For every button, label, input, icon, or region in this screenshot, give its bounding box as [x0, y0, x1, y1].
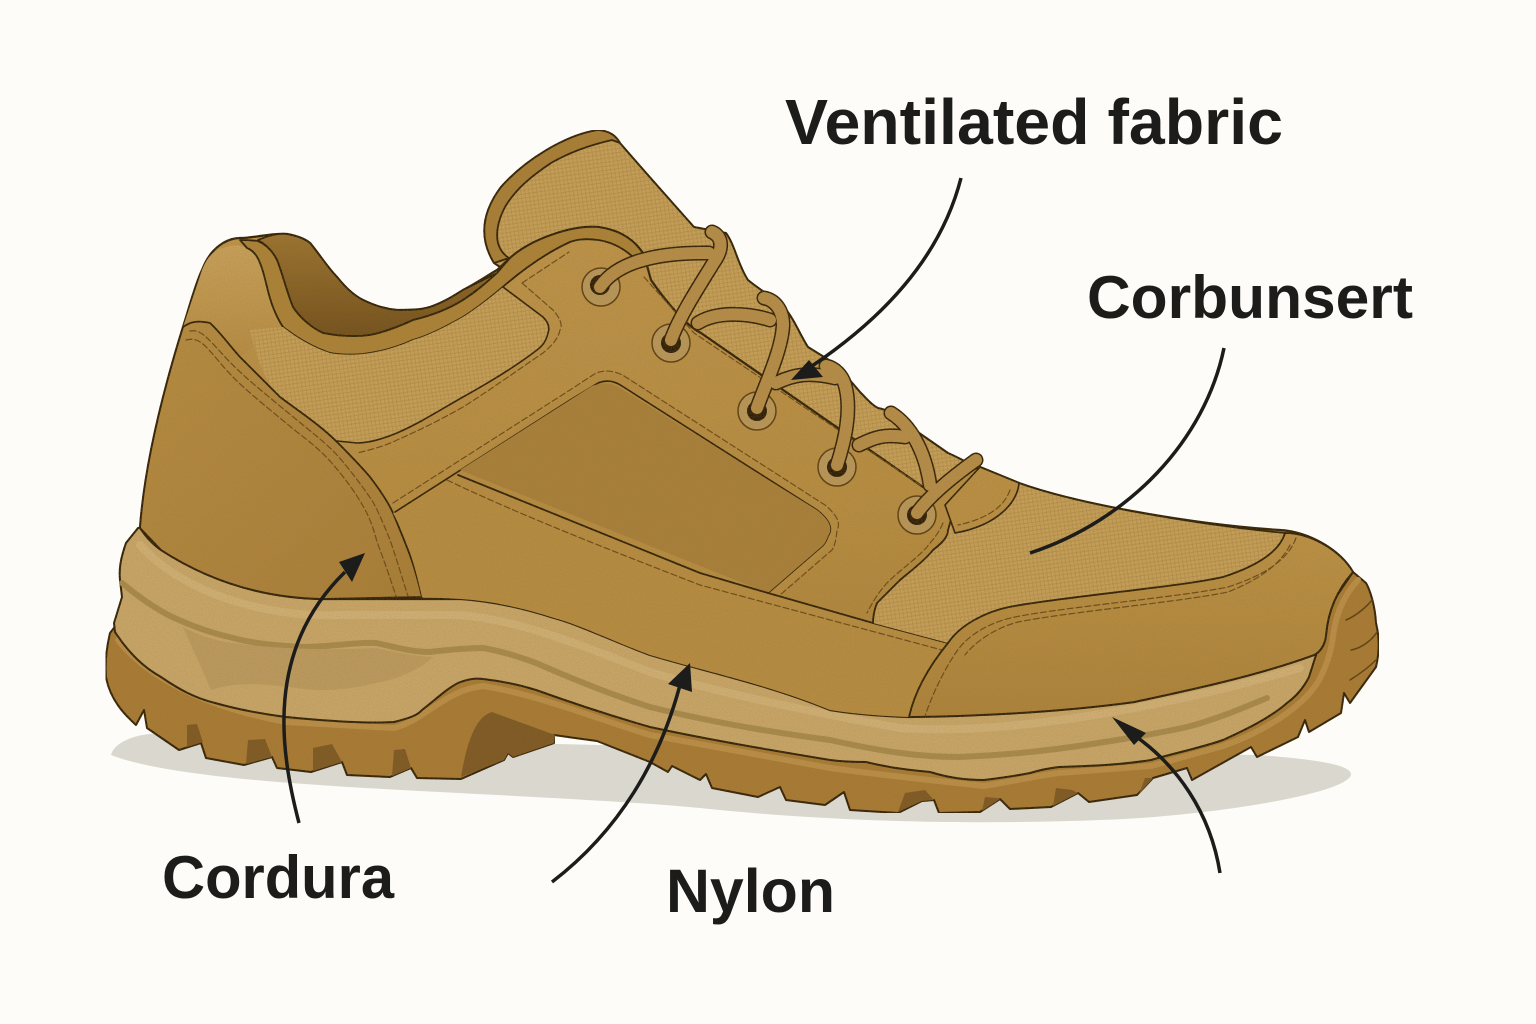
- label: corbunsert: Corbunsert: [1087, 264, 1413, 331]
- eyestay stitching: [357, 252, 923, 487]
- lace tab: [945, 467, 1019, 533]
- arrow: nylon: [552, 663, 692, 882]
- side strap: [393, 373, 948, 717]
- upper body: [140, 227, 1353, 717]
- suede window panel: [460, 383, 830, 593]
- arrow: unlabelled midsole: [1112, 717, 1220, 873]
- arrow: ventilated fabric: [791, 178, 961, 380]
- label: cordura: Cordura: [162, 844, 395, 911]
- midsole sculpted panel: [183, 627, 433, 690]
- ground shadow: [111, 734, 1351, 822]
- arrow: cordura: [284, 553, 365, 823]
- label: nylon: Nylon: [666, 857, 835, 925]
- eyelets: [582, 268, 936, 534]
- label: ventilated fabric: Ventilated fabric: [785, 86, 1283, 158]
- tongue and gusset fabric: [484, 130, 1019, 560]
- laces: [600, 232, 976, 513]
- strap seam: [458, 475, 948, 643]
- shoe illustration: [106, 130, 1379, 813]
- heel counter: [140, 322, 422, 599]
- toe ribs: [1346, 600, 1377, 680]
- collar lining: [258, 234, 497, 336]
- side fabric panel: [250, 287, 549, 443]
- midsole: [114, 500, 1316, 780]
- toe fabric vamp: [873, 483, 1285, 643]
- collar lip: [240, 227, 644, 355]
- toe cap: [909, 533, 1353, 717]
- outsole with lugs: [106, 572, 1379, 813]
- heel tab highlight: [183, 245, 283, 357]
- tongue pad: [484, 130, 620, 263]
- arrow: corbunsert: [1030, 348, 1224, 553]
- lug shadows: [187, 712, 1153, 812]
- midsole highlight: [140, 545, 1300, 729]
- midsole groove: [122, 583, 1267, 757]
- outsole rim and toe bumper: [118, 580, 1358, 786]
